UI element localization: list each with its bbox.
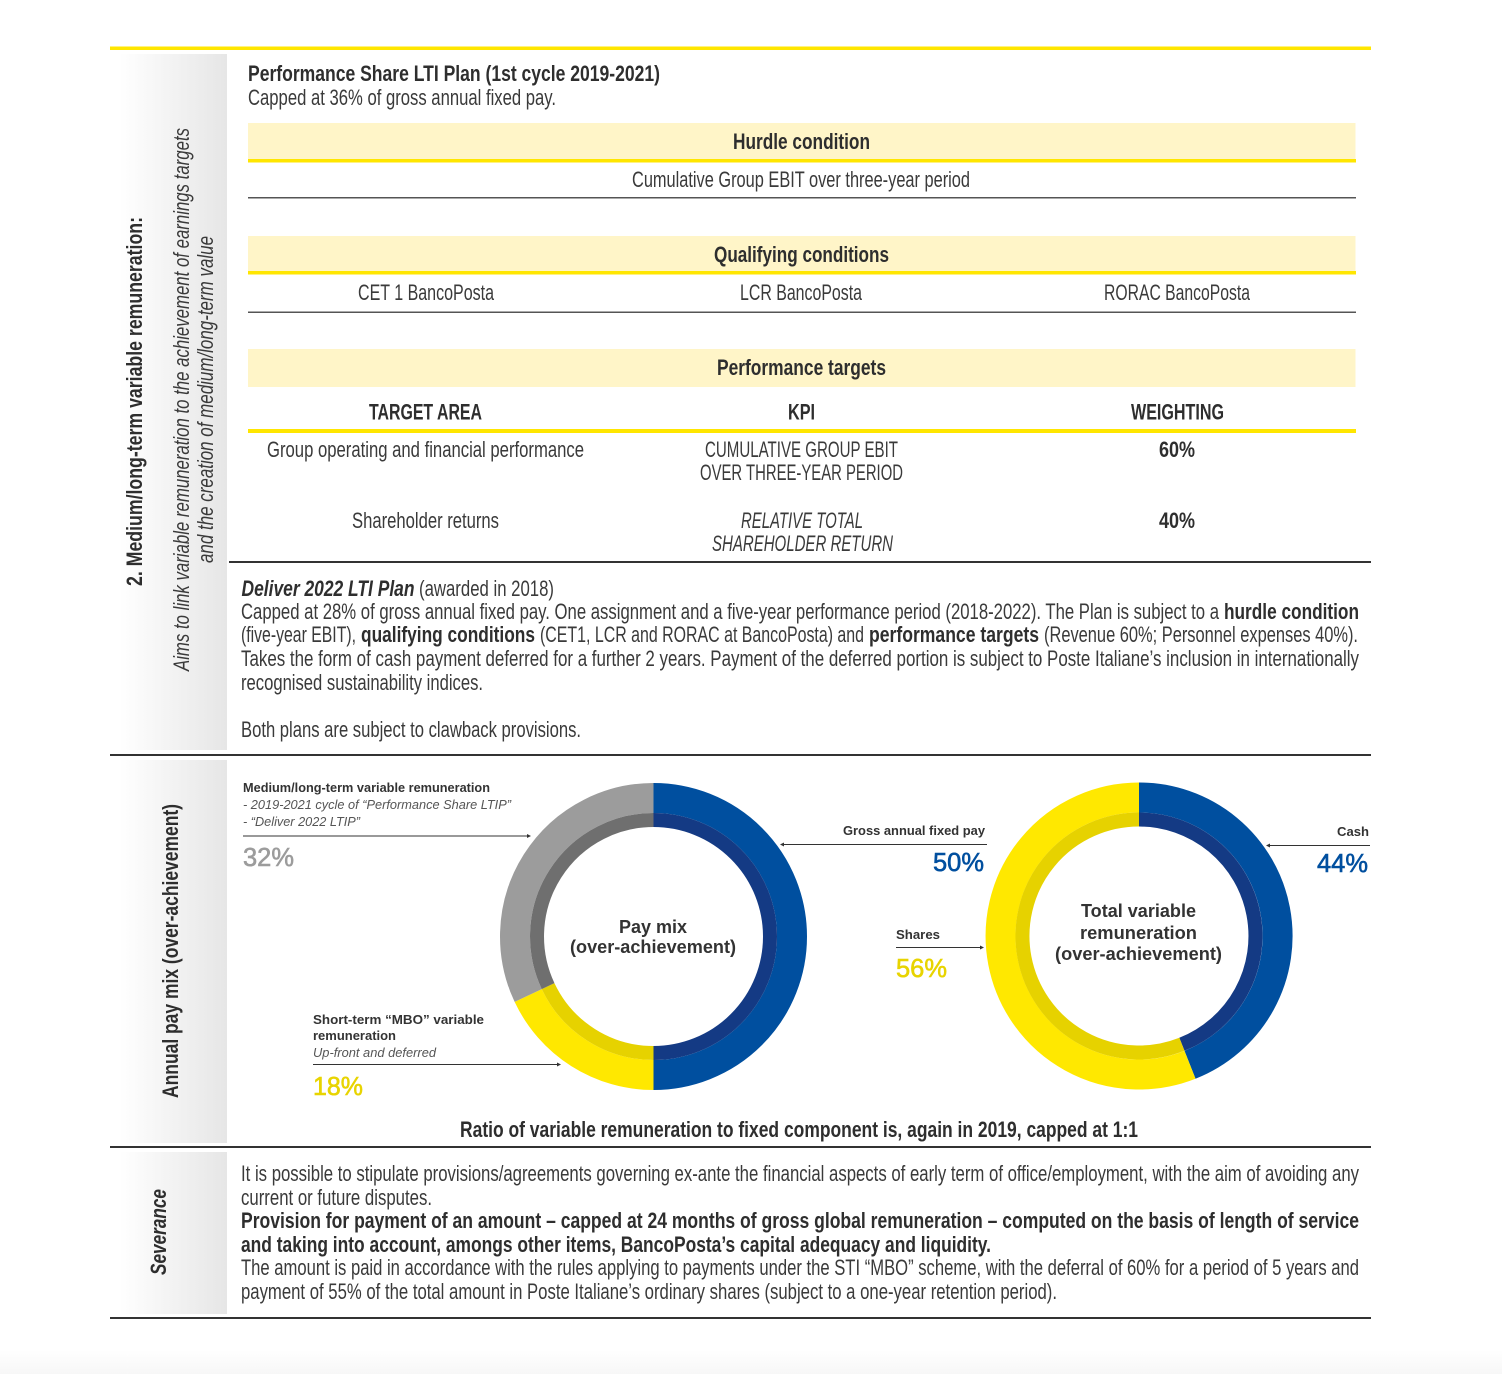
table: performance targets: 60% [1159, 437, 1195, 462]
severance text: payment of 55% of the total amount in Poste Italiane’s ordinary shares (subject to a one-year retention period). [241, 1279, 1057, 1304]
table: qualifying conditions: Qualifying conditions [714, 242, 889, 267]
table: performance targets: Shareholder returns [352, 508, 499, 533]
donut centre label: pay mix: Pay mix [619, 917, 687, 937]
table: hurdle condition: Hurdle condition [733, 129, 870, 154]
callout: short-term MBO 18%: 18% [313, 1071, 363, 1101]
deliver plan text: Deliver 2022 LTI Plan [242, 576, 414, 601]
table: qualifying conditions: CET 1 BancoPosta [358, 280, 495, 305]
callout: medium/long-term 32%: - “Deliver 2022 LTIP” [243, 814, 361, 829]
table: performance targets: 40% [1159, 508, 1195, 533]
callout: medium/long-term 32% [243, 780, 531, 872]
severance text: current or future disputes. [241, 1185, 432, 1210]
callout: medium/long-term 32%: 32% [243, 842, 294, 872]
plan title: Performance Share LTI Plan (1st cycle 2019-2021) [248, 61, 660, 86]
callout: cash 44%: 44% [1317, 848, 1368, 878]
deliver plan text [241, 576, 1359, 742]
callout: short-term MBO 18% [313, 1012, 561, 1101]
table: performance targets: TARGET AREA [369, 400, 482, 424]
sidebar heading: Severance [146, 1189, 171, 1275]
table: performance targets: KPI [788, 400, 815, 424]
severance text [241, 1161, 1359, 1304]
sidebar heading: 2. Medium/long-term variable remuneration: [122, 217, 147, 586]
callout: short-term MBO 18%: remuneration [313, 1028, 396, 1043]
deliver plan text: recognised sustainability indices. [241, 670, 483, 695]
table: qualifying conditions: RORAC BancoPosta [1104, 280, 1251, 305]
callout: shares 56% [896, 927, 984, 983]
deliver plan text: (five-year EBIT), [241, 622, 356, 647]
table: performance targets: RELATIVE TOTAL [741, 508, 863, 533]
sidebar background [110, 54, 227, 750]
callout: shares 56%: 56% [896, 953, 947, 983]
callout: medium/long-term 32%: - 2019-2021 cycle of “Performance Share LTIP” [243, 797, 512, 812]
table: performance targets: OVER THREE-YEAR PERIOD [700, 460, 903, 485]
callout: gross annual fixed pay 50%: 50% [933, 847, 984, 877]
plan cap: Capped at 36% of gross annual fixed pay. [248, 85, 556, 110]
panel: medium/long-term variable remuneration [110, 54, 1359, 750]
callout: short-term MBO 18%: Short-term “MBO” variable [313, 1012, 484, 1027]
callout: gross annual fixed pay 50% [780, 823, 987, 877]
deliver plan text: hurdle condition [1224, 599, 1359, 624]
deliver plan text: Capped at 28% of gross annual fixed pay. One assignment and a five-year performance period (2018-2022). The Plan is subject to a [241, 599, 1220, 624]
donut centre label: total variable [1055, 901, 1222, 964]
sidebar background [110, 760, 227, 1143]
panel: severance [110, 1152, 1359, 1314]
ratio caption: Ratio of variable remuneration to fixed component is, again in 2019, capped at 1:1 [460, 1117, 1138, 1142]
table: performance targets: SHAREHOLDER RETURN [712, 531, 893, 556]
deliver plan text: (awarded in 2018) [419, 576, 554, 601]
callout: short-term MBO 18%: Up-front and deferred [313, 1045, 437, 1060]
table: hurdle condition: Cumulative Group EBIT over three-year period [632, 167, 970, 192]
donut chart: total variable remuneration [1001, 798, 1278, 1074]
callout: cash 44% [1266, 824, 1370, 878]
table: qualifying conditions: LCR BancoPosta [740, 280, 863, 305]
severance text: and taking into account, amongs other items, BancoPosta’s capital adequacy and liquidity. [241, 1232, 991, 1257]
sidebar heading: Annual pay mix (over-achievement) [158, 804, 183, 1098]
callout: gross annual fixed pay 50%: Gross annual fixed pay [843, 823, 986, 838]
sidebar description: and the creation of medium/long-term value [193, 236, 218, 563]
donut centre label: total variable: remuneration [1080, 923, 1197, 943]
donut centre label: total variable: (over-achievement) [1055, 944, 1222, 964]
sidebar background [110, 1152, 227, 1314]
deliver plan text: (Revenue 60%; Personnel expenses 40%). [1044, 622, 1358, 647]
deliver plan text: qualifying conditions [361, 622, 535, 647]
donut centre label: total variable: Total variable [1081, 901, 1196, 921]
deliver plan text: performance targets [869, 622, 1039, 647]
table: hurdle condition [248, 123, 1356, 198]
table: performance targets: WEIGHTING [1131, 400, 1224, 424]
table: qualifying conditions [248, 236, 1356, 313]
donut centre label: pay mix: (over-achievement) [570, 937, 736, 957]
table: performance targets: CUMULATIVE GROUP EBIT [705, 437, 898, 462]
callout: shares 56%: Shares [896, 927, 940, 942]
table: performance targets: Group operating and financial performance [267, 437, 584, 462]
donut chart: pay mix [515, 798, 792, 1075]
deliver plan text: Both plans are subject to clawback provisions. [241, 717, 581, 742]
panel: annual pay mix [110, 760, 1370, 1143]
callout: cash 44%: Cash [1337, 824, 1369, 839]
sidebar description [169, 128, 218, 673]
table: performance targets [248, 349, 1356, 556]
donut centre label: pay mix [570, 917, 736, 957]
callout: medium/long-term 32%: Medium/long-term variable remuneration [243, 780, 490, 795]
deliver plan text: (CET1, LCR and RORAC at BancoPosta) and [540, 622, 864, 647]
table: performance targets: Performance targets [717, 355, 886, 380]
